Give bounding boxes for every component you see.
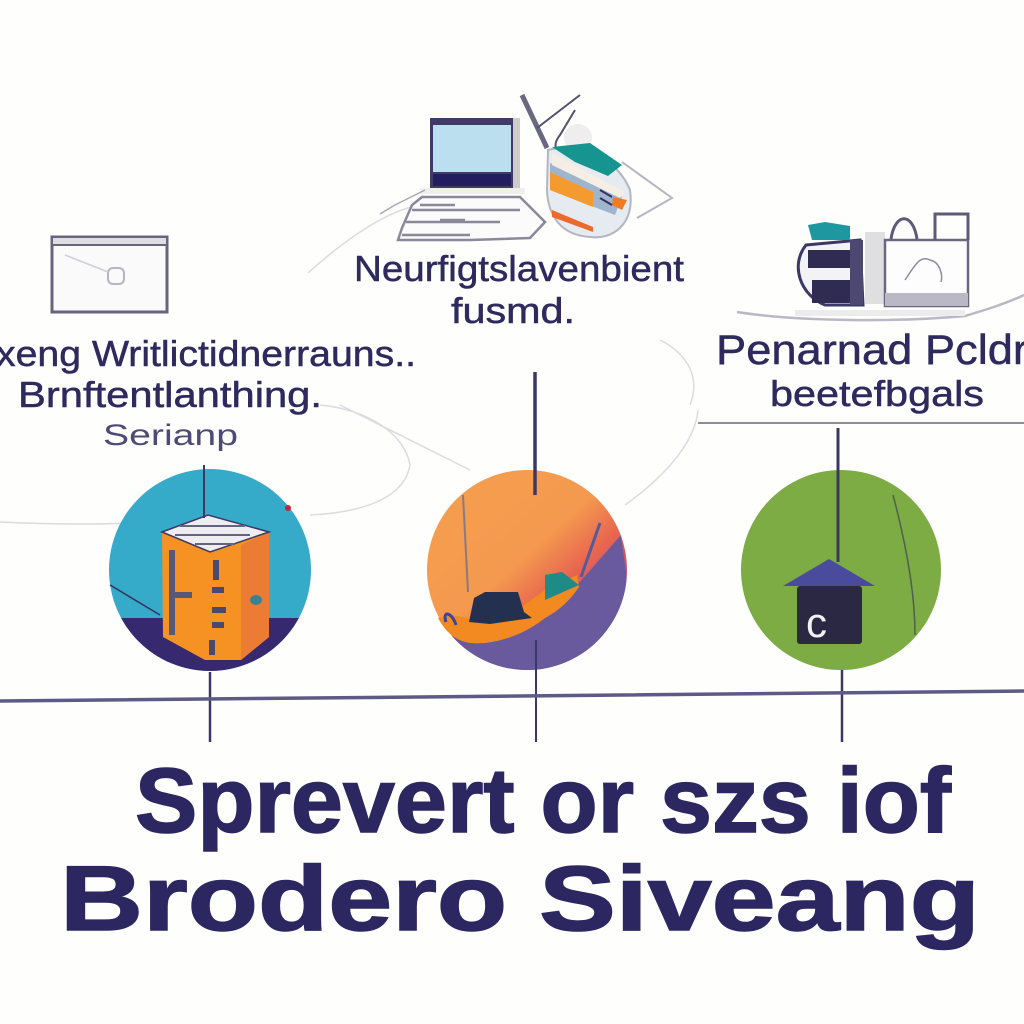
- panel: teal circle with box: [109, 469, 311, 671]
- title: Sprevert or szs iof: [135, 750, 951, 852]
- timeline line: [0, 691, 1024, 701]
- title: [60, 750, 980, 950]
- panel: green circle with house: [741, 470, 941, 670]
- text: right label: beetefbgals: [770, 373, 984, 414]
- text: left label: [0, 333, 416, 452]
- icon: bag and panel right: [737, 214, 1024, 320]
- text: top label: fusmd.: [451, 290, 575, 331]
- text: right label: [716, 326, 1024, 414]
- icon: laptop top: [380, 118, 545, 240]
- text: right label: Penarnad Pcldr: [716, 326, 1024, 373]
- text: left label: Brnftentlanthing.: [18, 374, 322, 415]
- icon: monitor left: [52, 237, 167, 312]
- text: left label: xeng Writlictidnerrauns..: [0, 333, 416, 374]
- panel: orange circle with boat: [427, 470, 627, 670]
- icon: backpack device top: [522, 95, 672, 237]
- text: top label: [354, 248, 684, 331]
- title: Brodero Siveang: [60, 848, 980, 950]
- connector lines: [204, 372, 842, 742]
- text: left label: Serianp: [103, 419, 238, 452]
- panel: green circle with house: c: [806, 599, 827, 646]
- text: top label: Neurfigtslavenbient: [354, 248, 684, 289]
